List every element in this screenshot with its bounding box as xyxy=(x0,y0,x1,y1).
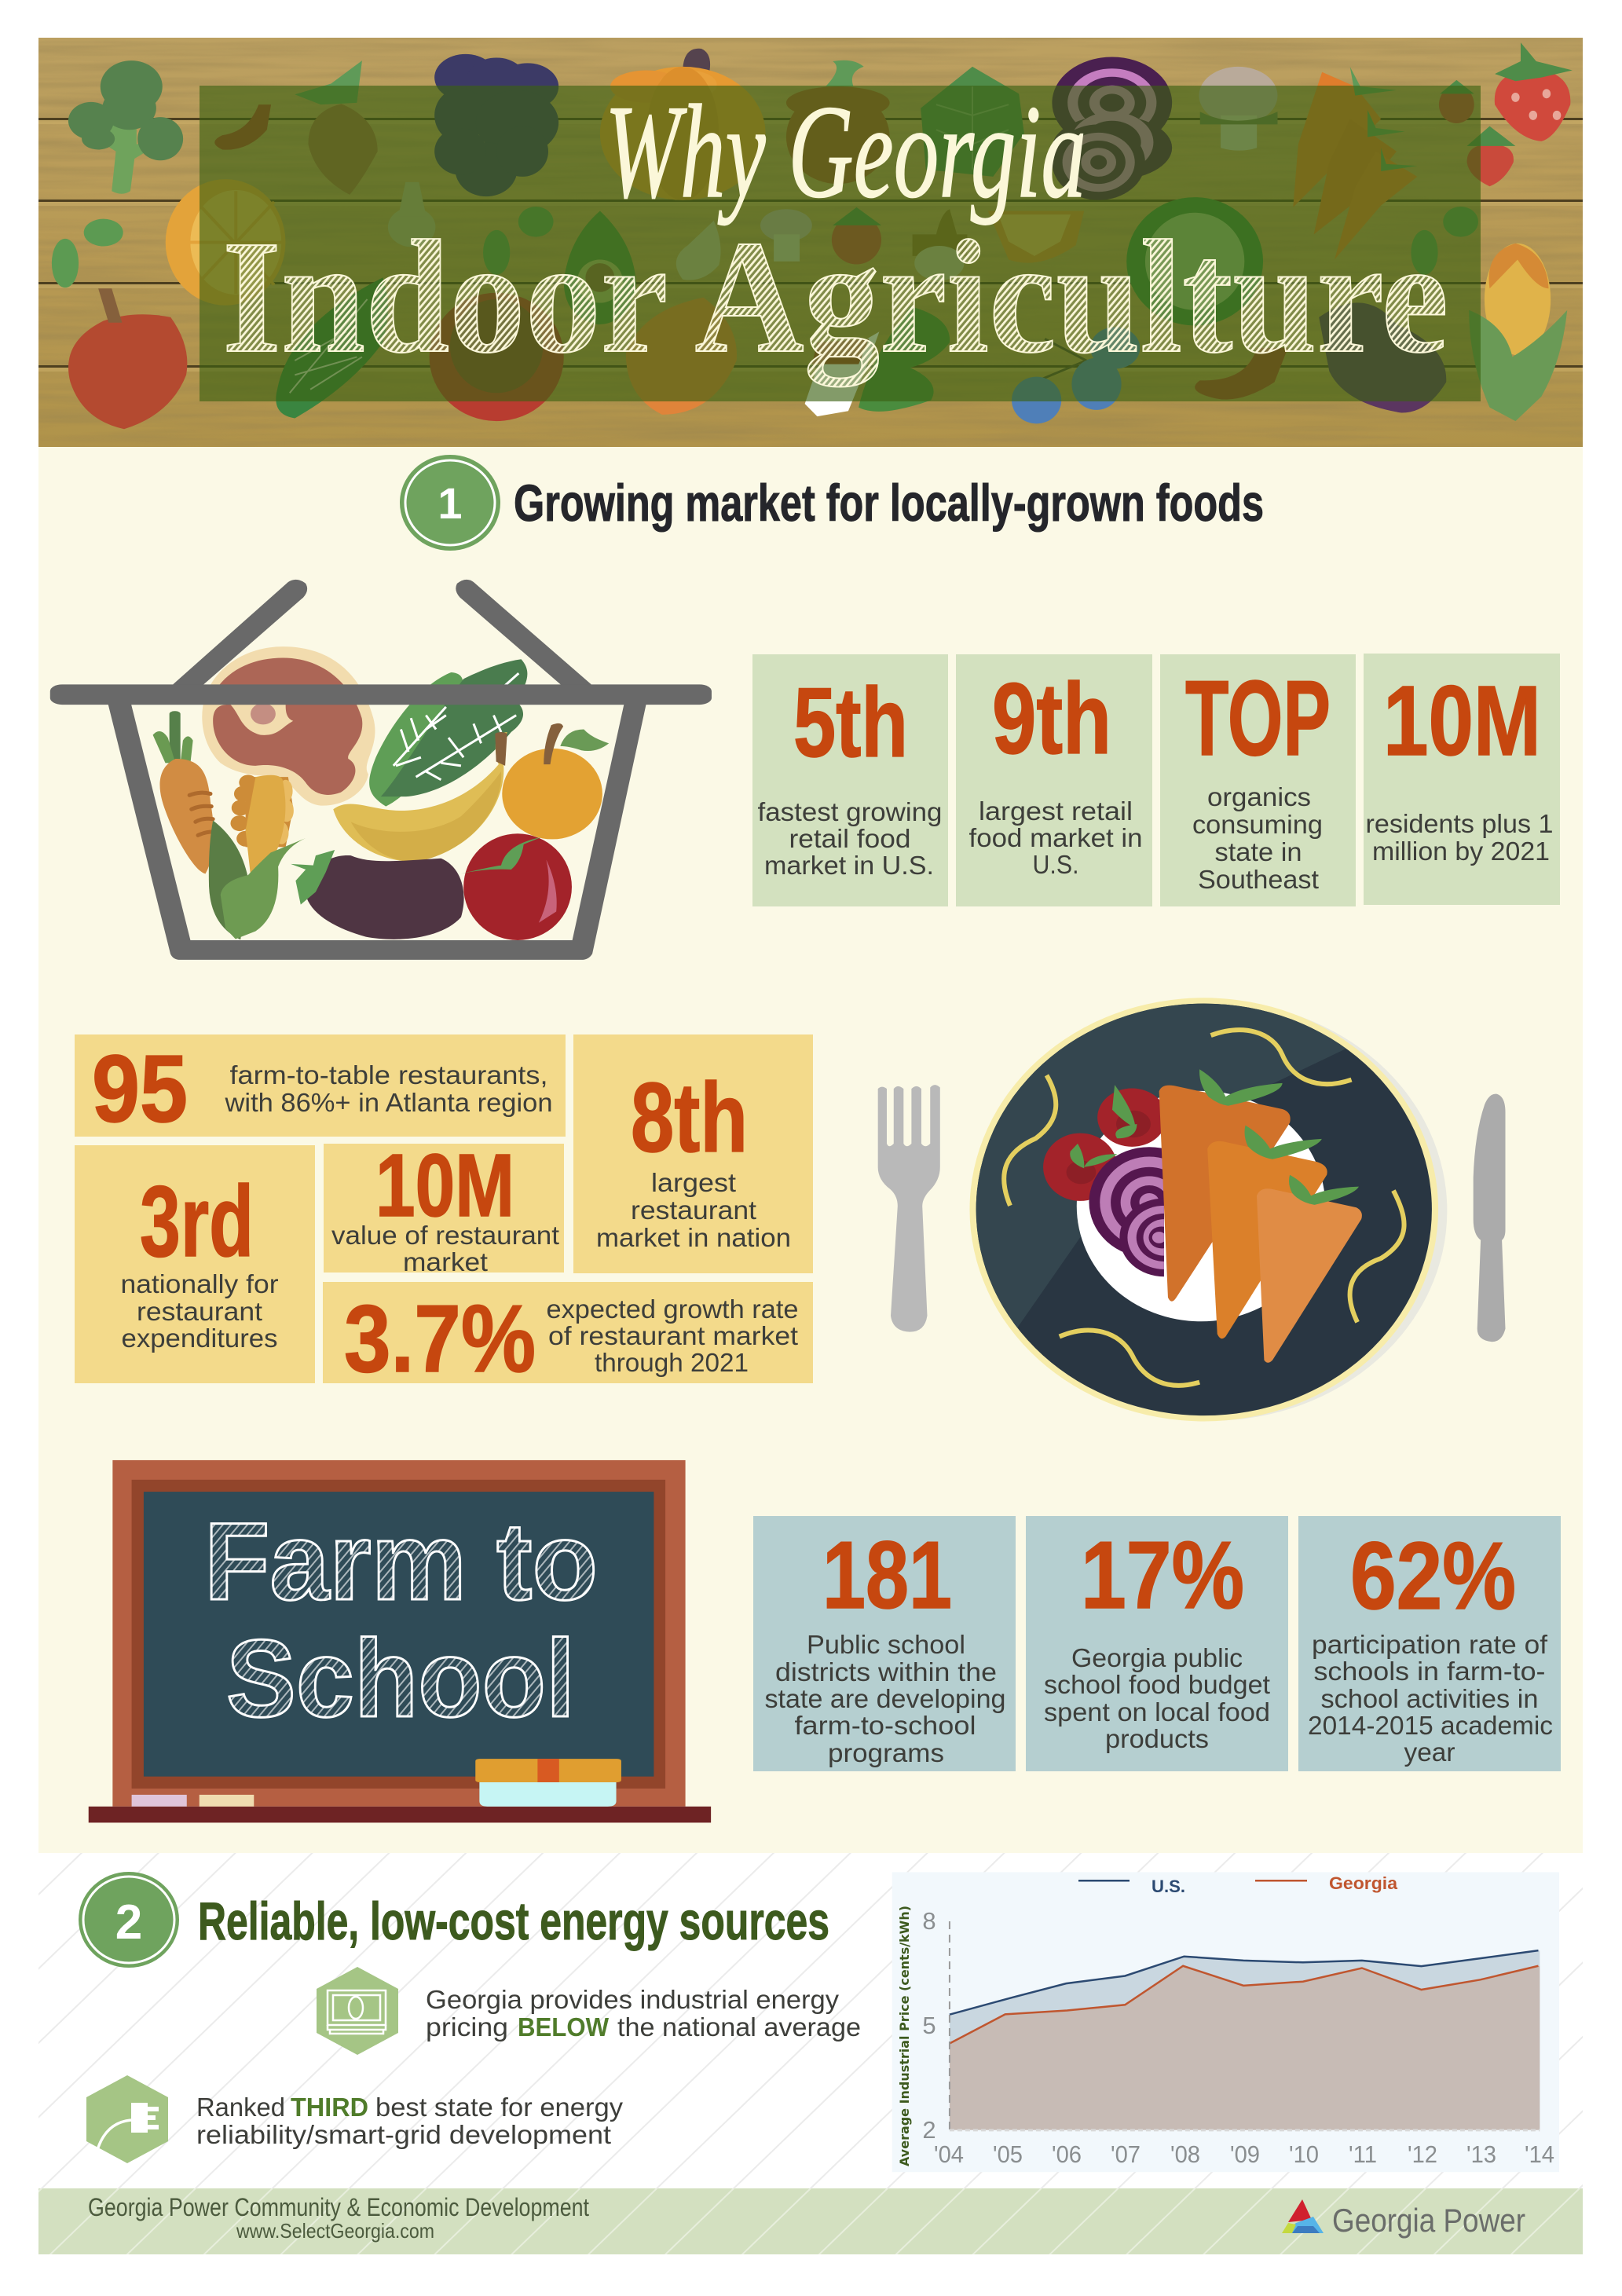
stat: 17%: school food budget xyxy=(1044,1670,1270,1699)
icon: grocery basket xyxy=(50,580,712,960)
stat: 5th: retail food xyxy=(789,824,911,853)
hero banner xyxy=(38,38,1583,447)
stat: 5th: fastest growing xyxy=(757,797,943,826)
icon: chalkboard xyxy=(89,1460,711,1822)
text: energy reliability ranking: Ranked xyxy=(196,2093,285,2122)
stat: 10M restaurant value: 10M xyxy=(375,1136,514,1235)
chart x axis: '12 xyxy=(1408,2140,1437,2168)
stat: 95: 95 xyxy=(92,1035,188,1142)
logo: Georgia Power xyxy=(1282,2199,1525,2239)
chart x axis xyxy=(934,2140,1554,2168)
stat: 8th: largest xyxy=(651,1168,736,1197)
title: Why Georgia: Why Georgia xyxy=(605,78,1086,225)
chalk text xyxy=(204,1500,598,1740)
chart y axis xyxy=(897,1906,936,2166)
chart x axis: '13 xyxy=(1466,2140,1496,2168)
stat: 5th: market in U.S. xyxy=(764,851,934,880)
stat: 95: with 86%+ in Atlanta region xyxy=(224,1088,553,1117)
icon: knife xyxy=(1474,1094,1505,1342)
stat: 10M restaurant value: market xyxy=(403,1247,488,1276)
stat: TOP: Southeast xyxy=(1198,865,1319,894)
chart x axis: '09 xyxy=(1230,2140,1260,2168)
stat: TOP: organics xyxy=(1207,782,1311,811)
stat: 62%: schools in farm-to- xyxy=(1313,1657,1546,1686)
panel: restaurant stats xyxy=(75,1034,813,1392)
logo: Georgia Power: Georgia Power xyxy=(1332,2202,1525,2239)
chalk text: Farm to xyxy=(204,1500,598,1623)
stat: 5th xyxy=(752,654,948,906)
stat: 17%: Georgia public xyxy=(1071,1643,1243,1672)
stat: 9th: 9th xyxy=(992,663,1111,775)
stat: 17%: spent on local food xyxy=(1044,1697,1270,1727)
chart area: U.S. xyxy=(950,1950,1540,2130)
stat: 3.7% xyxy=(323,1282,813,1392)
text: energy reliability ranking: THIRD xyxy=(291,2093,368,2122)
icon: money hexagon xyxy=(317,1967,398,2055)
stat: 3rd xyxy=(75,1145,315,1383)
stat: 10M restaurant value xyxy=(324,1136,564,1276)
chart legend: U.S. xyxy=(1152,1877,1185,1896)
stat: 3.7%: of restaurant market xyxy=(548,1321,798,1350)
icon: fork xyxy=(878,1085,940,1332)
text: industrial energy pricing: BELOW xyxy=(518,2012,610,2041)
chart x axis: '07 xyxy=(1111,2140,1141,2168)
stat: 62%: school activities in xyxy=(1321,1684,1538,1713)
stat: 62%: 62% xyxy=(1350,1522,1516,1629)
stat: TOP: TOP xyxy=(1185,658,1331,778)
section 2 heading: Reliable, low-cost energy sources xyxy=(198,1891,829,1951)
stat: 9th: U.S. xyxy=(1032,850,1079,879)
chart x axis: '11 xyxy=(1349,2140,1377,2168)
section 2 badge: 2 xyxy=(115,1895,142,1950)
stat: 3rd: nationally for xyxy=(121,1269,279,1298)
stat: 181: programs xyxy=(828,1738,944,1767)
stat: 10M residents: residents plus 1 xyxy=(1365,809,1554,838)
stat: 9th: food market in xyxy=(969,823,1142,852)
stat: 5th: 5th xyxy=(793,668,908,778)
stat: 17% xyxy=(1026,1516,1288,1771)
chart legend xyxy=(1078,1873,1398,1896)
text: industrial energy pricing xyxy=(426,1985,861,2041)
stat: 3.7%: 3.7% xyxy=(344,1285,536,1392)
stat: 62% xyxy=(1298,1516,1561,1771)
footer xyxy=(38,2188,1583,2254)
stat: 181: Public school xyxy=(807,1630,965,1659)
section 1 badge: 1 xyxy=(438,478,463,528)
section 1 badge xyxy=(400,455,500,551)
stat: 62%: year xyxy=(1404,1738,1455,1767)
chart x axis: '04 xyxy=(934,2140,964,2168)
stat: 10M residents xyxy=(1364,654,1560,905)
stat: TOP xyxy=(1160,654,1356,906)
section 2 badge xyxy=(79,1872,179,1968)
stat: 181: 181 xyxy=(822,1522,952,1628)
stat: 17%: products xyxy=(1105,1724,1209,1753)
chalk text: School xyxy=(226,1617,575,1740)
stat: 8th: market in nation xyxy=(596,1223,791,1252)
stat: 9th: largest retail xyxy=(979,796,1133,826)
chart y axis: 2 xyxy=(922,2116,936,2144)
vegetable illustrations xyxy=(52,42,1573,429)
stat: 95: farm-to-table restaurants, xyxy=(229,1060,548,1089)
section 1 heading: Growing market for locally-grown foods xyxy=(514,474,1264,532)
stat: TOP: consuming xyxy=(1192,810,1323,839)
stat: 3rd: 3rd xyxy=(140,1166,254,1278)
stat: 181 xyxy=(753,1516,1016,1771)
chart legend: Georgia xyxy=(1329,1873,1398,1893)
icon: plug hexagon xyxy=(86,2075,168,2163)
chart y axis: 5 xyxy=(922,2012,936,2039)
text: energy reliability ranking xyxy=(196,2093,624,2149)
text: energy reliability ranking: best state for energy xyxy=(375,2093,624,2122)
chart x axis: '08 xyxy=(1170,2140,1200,2168)
panel: school stats xyxy=(753,1516,1561,1771)
panel: retail stats xyxy=(752,654,1560,906)
text: energy reliability ranking: reliability/smart-grid development xyxy=(196,2120,611,2149)
footer url: www.SelectGeorgia.com xyxy=(236,2219,434,2243)
title: Indoor Agriculture: Indoor Agriculture xyxy=(222,207,1448,386)
chart area: Georgia xyxy=(950,1966,1540,2130)
stat: 181: farm-to-school xyxy=(795,1711,976,1740)
footer credit: Georgia Power Community & Economic Development xyxy=(88,2193,589,2221)
stat: 181: districts within the xyxy=(775,1657,997,1686)
panel: section 2 background xyxy=(38,1853,1583,2189)
stat: 17%: 17% xyxy=(1081,1522,1244,1628)
stat: 3.7%: expected growth rate xyxy=(547,1294,798,1324)
stat: 62%: participation rate of xyxy=(1312,1630,1548,1659)
stat: TOP: state in xyxy=(1214,837,1302,866)
chart x axis: '14 xyxy=(1525,2140,1554,2168)
text: industrial energy pricing: the national average xyxy=(617,2012,861,2041)
stat: 3rd: expenditures xyxy=(121,1324,278,1353)
stat: 95 xyxy=(75,1034,566,1142)
stat: 62%: 2014-2015 academic xyxy=(1308,1711,1553,1740)
text: industrial energy pricing: Georgia provides industrial energy xyxy=(426,1985,840,2014)
stat: 8th: 8th xyxy=(631,1064,748,1173)
text: industrial energy pricing: pricing xyxy=(426,2012,508,2041)
chart x axis: '06 xyxy=(1052,2140,1082,2168)
stat: 3rd: restaurant xyxy=(137,1297,262,1326)
stat: 8th xyxy=(573,1034,813,1273)
stat: 181: state are developing xyxy=(765,1684,1005,1713)
stat: 3.7%: through 2021 xyxy=(595,1348,749,1377)
chart x axis: '05 xyxy=(993,2140,1023,2168)
panel: section 1 background xyxy=(38,447,1583,1853)
chart: average industrial price xyxy=(892,1872,1559,2172)
icon: plate with fork and knife xyxy=(878,990,1505,1433)
title backing overlay xyxy=(200,86,1481,401)
stat: 10M residents: million by 2021 xyxy=(1372,837,1550,866)
chart y axis: 8 xyxy=(922,1907,936,1935)
stat: 10M restaurant value: value of restaurant xyxy=(331,1221,559,1250)
stat: 8th: restaurant xyxy=(631,1196,756,1225)
stat: 10M residents: 10M xyxy=(1383,665,1541,776)
stat: 9th xyxy=(956,654,1152,906)
chart y axis: Average Industrial Price (cents/kWh) xyxy=(897,1906,912,2166)
chart x axis: '10 xyxy=(1289,2140,1319,2168)
